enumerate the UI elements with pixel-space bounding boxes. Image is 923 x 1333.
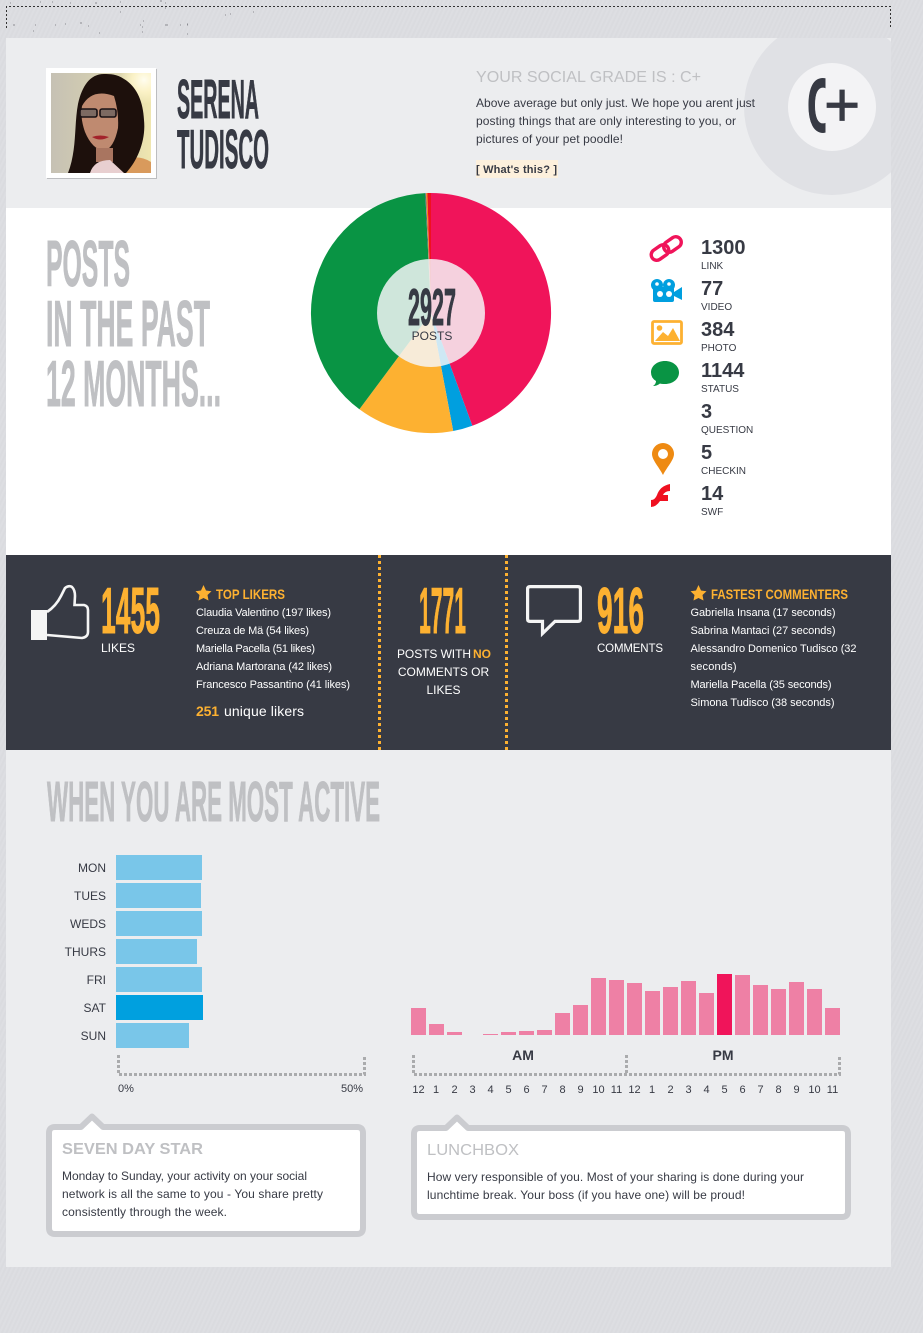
hour axis: 7	[541, 1084, 548, 1096]
legend item: checkin: CHECKIN	[701, 466, 746, 477]
panel: when you are most active	[6, 750, 891, 1267]
legend item: video: VIDEO	[701, 302, 732, 313]
legend item: swf	[701, 483, 724, 518]
hour axis: 11	[611, 1084, 622, 1096]
hour axis: 8	[559, 1084, 566, 1096]
top likers: Adriana Martorana (42 likes)	[196, 661, 332, 673]
fastest commenters: Mariella Pacella (35 seconds)	[690, 679, 832, 691]
hour axis: 9	[793, 1084, 800, 1096]
bar chart: by day: MON	[78, 861, 106, 875]
callout: seven day star: consistently through the week.	[62, 1205, 227, 1219]
what's this link: [ What's this? ]	[476, 164, 557, 176]
hour axis: 1	[433, 1084, 439, 1096]
top likers	[196, 585, 350, 719]
fastest commenters: Sabrina Mantaci (27 seconds)	[690, 625, 836, 637]
hour axis: 3	[469, 1084, 476, 1096]
pie chart: posts by type	[311, 193, 551, 433]
fastest commenters: Simona Tudisco (38 seconds)	[690, 697, 834, 709]
heading: posts in the past 12 months: POSTS	[46, 227, 130, 300]
top likers: Creuza de Mä (54 likes)	[196, 625, 309, 637]
legend item: photo: PHOTO	[701, 343, 737, 354]
legend item: video	[701, 278, 732, 313]
icon: link	[649, 235, 683, 262]
hour axis: 6	[523, 1084, 530, 1096]
icon: video	[651, 279, 682, 302]
posts with no comments or likes	[397, 574, 491, 697]
social grade text: Above average but only just. We hope you arent just	[476, 96, 756, 110]
grade letter	[808, 78, 858, 133]
icon: flash	[651, 484, 670, 507]
hour axis: 10	[808, 1084, 821, 1096]
icon: comment bubble	[528, 587, 580, 634]
top likers: unique likers	[224, 703, 304, 719]
total posts: POSTS	[412, 329, 452, 343]
panel: posts: IN THE PAST	[46, 287, 210, 360]
top likers: TOP LIKERS	[216, 586, 285, 602]
grade letter: C	[807, 64, 837, 149]
hour axis: 12	[412, 1084, 425, 1096]
social grade text: posting things that are only interesting to you, or	[476, 114, 736, 128]
comments count: 916	[597, 574, 644, 647]
hour axis: AM	[512, 1047, 534, 1063]
hour axis: 11	[827, 1084, 838, 1096]
bar chart: by day: SUN	[81, 1029, 106, 1043]
fastest commenters: seconds)	[690, 661, 736, 673]
social grade text: YOUR SOCIAL GRADE IS : C+	[476, 69, 701, 86]
profile photo	[46, 68, 157, 179]
callout: lunchbox: LUNCHBOX	[427, 1142, 519, 1159]
legend item: link: LINK	[701, 261, 724, 272]
top likers: Francesco Passantino (41 likes)	[196, 679, 350, 691]
legend item: question	[701, 401, 753, 436]
legend item: swf: SWF	[701, 507, 723, 518]
pie chart: posts by type: 2927	[408, 279, 456, 337]
fastest commenters: Gabriella Insana (17 seconds)	[690, 607, 836, 619]
bar chart: by day: THURS	[65, 945, 106, 959]
hour axis	[412, 1047, 840, 1096]
legend item: link	[701, 237, 746, 272]
bar chart: by day: FRI	[87, 973, 106, 987]
hour axis: 5	[505, 1084, 512, 1096]
legend item: checkin	[701, 442, 746, 477]
legend item: question: QUESTION	[701, 425, 753, 436]
likes count: LIKES	[101, 641, 135, 655]
hour axis: 5	[721, 1084, 728, 1096]
callout: seven day star: SEVEN DAY STAR	[62, 1141, 203, 1158]
callout: lunchbox: lunchtime break. Your boss (if you have one) will be proud!	[427, 1188, 745, 1202]
icon: thumbs up	[31, 586, 88, 640]
top likers: Claudia Valentino (197 likes)	[196, 607, 331, 619]
bar chart: by day: SAT	[84, 1001, 107, 1015]
bar chart: by day: WEDS	[70, 917, 106, 931]
bar chart: by day: 0%	[118, 1083, 134, 1095]
hour axis: 2	[667, 1084, 674, 1096]
what's this link	[476, 160, 558, 178]
heading: posts in the past 12 months	[46, 227, 221, 420]
hour axis: 12	[628, 1084, 641, 1096]
total posts	[408, 279, 456, 343]
legend item: status: STATUS	[701, 384, 739, 395]
panel: posts	[6, 208, 891, 555]
panel: engagement: 1771	[419, 574, 466, 647]
legend item: link: 1300	[701, 237, 746, 259]
hour axis: PM	[712, 1047, 734, 1063]
panel: posts: 12 MONTHS...	[46, 347, 221, 420]
callout: seven day star: network is all the same to you - You share pretty	[62, 1187, 323, 1201]
icon: status bubble	[651, 361, 679, 386]
hour axis: 10	[592, 1084, 605, 1096]
callout: lunchbox: How very responsible of you. Most of your sharing is done during your	[427, 1170, 804, 1184]
bar chart: by hour	[411, 974, 840, 1035]
panel: engagement: 1455	[101, 574, 160, 647]
hour axis: 2	[451, 1084, 458, 1096]
posts with no comments or likes: COMMENTS OR	[398, 665, 489, 679]
legend item: photo	[701, 319, 737, 354]
hour axis: 4	[703, 1084, 710, 1096]
legend item: photo: 384	[701, 319, 735, 341]
posts with no comments or likes: LIKES	[426, 683, 461, 697]
panel: engagement	[6, 555, 891, 750]
legend item: video: 77	[701, 278, 723, 300]
legend: post types	[649, 235, 753, 518]
grade badge circle	[744, 38, 891, 195]
hour axis: 3	[685, 1084, 692, 1096]
posts with no comments or likes: NO	[473, 647, 491, 661]
hour axis: 8	[775, 1084, 782, 1096]
legend item: status: 1144	[701, 360, 745, 382]
legend item: checkin: 5	[701, 442, 712, 464]
icon: checkin pin	[652, 443, 674, 475]
fastest commenters: FASTEST COMMENTERS	[711, 586, 848, 602]
social grade text	[476, 69, 756, 146]
top likers: Mariella Pacella (51 likes)	[196, 643, 315, 655]
bar chart: by day	[65, 855, 364, 1095]
posts with no comments or likes: POSTS WITH	[397, 647, 471, 661]
legend item: question: 3	[701, 401, 712, 423]
panel: profile header: SERENA	[177, 68, 259, 130]
grade letter: +	[824, 71, 860, 140]
legend item: status	[701, 360, 745, 395]
hour axis: 1	[649, 1084, 655, 1096]
panel: profile header	[6, 38, 891, 208]
panel: when you are most active: WHEN YOU ARE MOST ACTIVE	[47, 770, 380, 834]
hour axis: 9	[577, 1084, 584, 1096]
hour axis: 4	[487, 1084, 494, 1096]
fastest commenters: Alessandro Domenico Tudisco (32	[690, 643, 856, 655]
hour axis: 6	[739, 1084, 746, 1096]
likes count	[101, 574, 160, 655]
icon: photo	[652, 322, 682, 344]
bar chart: by day: TUES	[74, 889, 106, 903]
bar chart: by day: 50%	[341, 1083, 363, 1095]
social grade text: pictures of your pet poodle!	[476, 132, 623, 146]
comments count	[597, 574, 663, 655]
callout: lunchbox	[414, 1118, 848, 1217]
name	[177, 68, 269, 180]
panel: profile header: TUDISCO	[177, 118, 269, 180]
comments count: COMMENTS	[597, 643, 663, 655]
top likers: 251	[196, 703, 219, 719]
legend item: swf: 14	[701, 483, 724, 505]
callout: seven day star: Monday to Sunday, your activity on your social	[62, 1169, 307, 1183]
hour axis: 7	[757, 1084, 764, 1096]
fastest commenters	[690, 585, 856, 709]
callout: seven day star	[49, 1116, 363, 1234]
